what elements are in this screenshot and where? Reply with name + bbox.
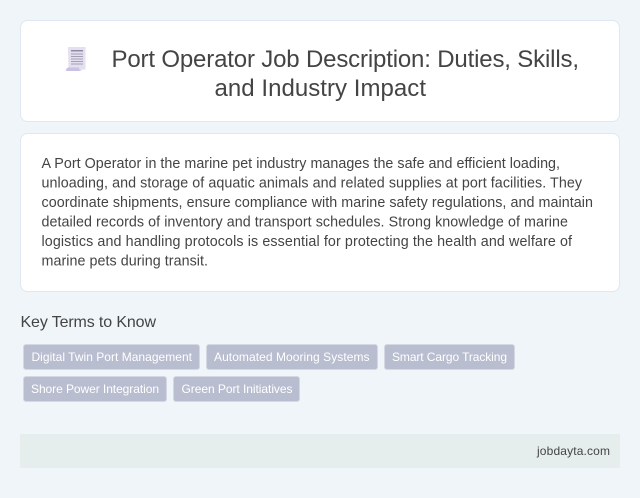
description text: detailed records of inventory and transport schedules. Strong knowledge of marine	[42, 214, 568, 230]
heading: key terms: Key Terms to Know	[20, 314, 156, 331]
description text: coordinate shipments, ensure compliance with marine safety regulations, and maintain	[42, 195, 593, 211]
description text	[42, 156, 593, 270]
panel: title card	[20, 20, 620, 122]
description text: unloading, and storage of aquatic animals and related supplies at port facilities. They	[42, 176, 583, 192]
description text: logistics and handling protocols is essential for protecting the health and welfare of	[42, 234, 572, 250]
tag: digital twin: Digital Twin Port Management	[32, 350, 193, 364]
tag: shore power	[24, 376, 166, 402]
title: Port Operator Job Description: Duties, Skills,	[112, 46, 579, 73]
tag: green port: Green Port Initiatives	[182, 382, 292, 396]
description text: marine pets during transit.	[42, 254, 208, 270]
tag: digital twin	[24, 344, 200, 370]
tag: smart cargo: Smart Cargo Tracking	[392, 350, 507, 364]
footer bar	[20, 434, 620, 468]
tag: automated mooring: Automated Mooring Systems	[214, 350, 370, 364]
tag: shore power: Shore Power Integration	[31, 382, 159, 396]
tag: automated mooring	[206, 344, 378, 370]
title: and Industry Impact	[214, 75, 426, 102]
title	[112, 46, 579, 102]
icon: document scroll	[66, 47, 86, 71]
description text: A Port Operator in the marine pet industry manages the safe and efficient loading,	[42, 156, 560, 172]
footer bar: jobdayta.com	[536, 444, 610, 458]
panel: description card	[20, 134, 620, 292]
tag: green port	[174, 376, 300, 402]
tag: smart cargo	[384, 344, 514, 370]
